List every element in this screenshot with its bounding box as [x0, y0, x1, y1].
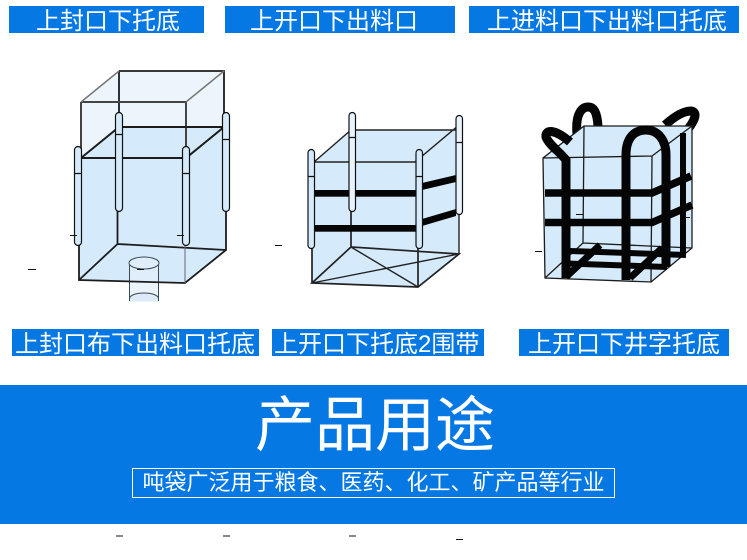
bag 2: open top with two bands	[275, 112, 462, 287]
label: top right bag type: 上进料口下出料口托底	[487, 8, 727, 35]
bag 1: closed top spout with flat bottom	[28, 71, 230, 302]
bands	[314, 175, 456, 232]
label: top left bag type	[9, 6, 204, 33]
rear loops	[577, 107, 695, 134]
front loops	[546, 130, 666, 280]
label: lower right bag type: 上开口下井字托底	[528, 331, 720, 358]
label: top left bag type: 上封口下托底	[36, 8, 180, 35]
panel: product uses banner	[0, 385, 747, 524]
label: top middle bag type	[225, 6, 455, 33]
belts	[545, 133, 692, 278]
spout	[129, 257, 159, 302]
lifting straps	[74, 112, 230, 246]
lifting straps	[308, 112, 462, 248]
subtitle box: 吨袋广泛用于粮食、医药、化工、矿产品等行业	[142, 470, 604, 495]
label: top middle bag type: 上开口下出料口	[250, 8, 418, 35]
bag 3: cross-belt with loops	[535, 107, 695, 282]
heading: 产品用途	[255, 392, 495, 459]
label: lower middle bag type: 上开口下托底2围带	[274, 331, 479, 358]
small dash marks	[116, 536, 463, 540]
label: lower left bag type: 上封口布下出料口托底	[15, 331, 255, 358]
